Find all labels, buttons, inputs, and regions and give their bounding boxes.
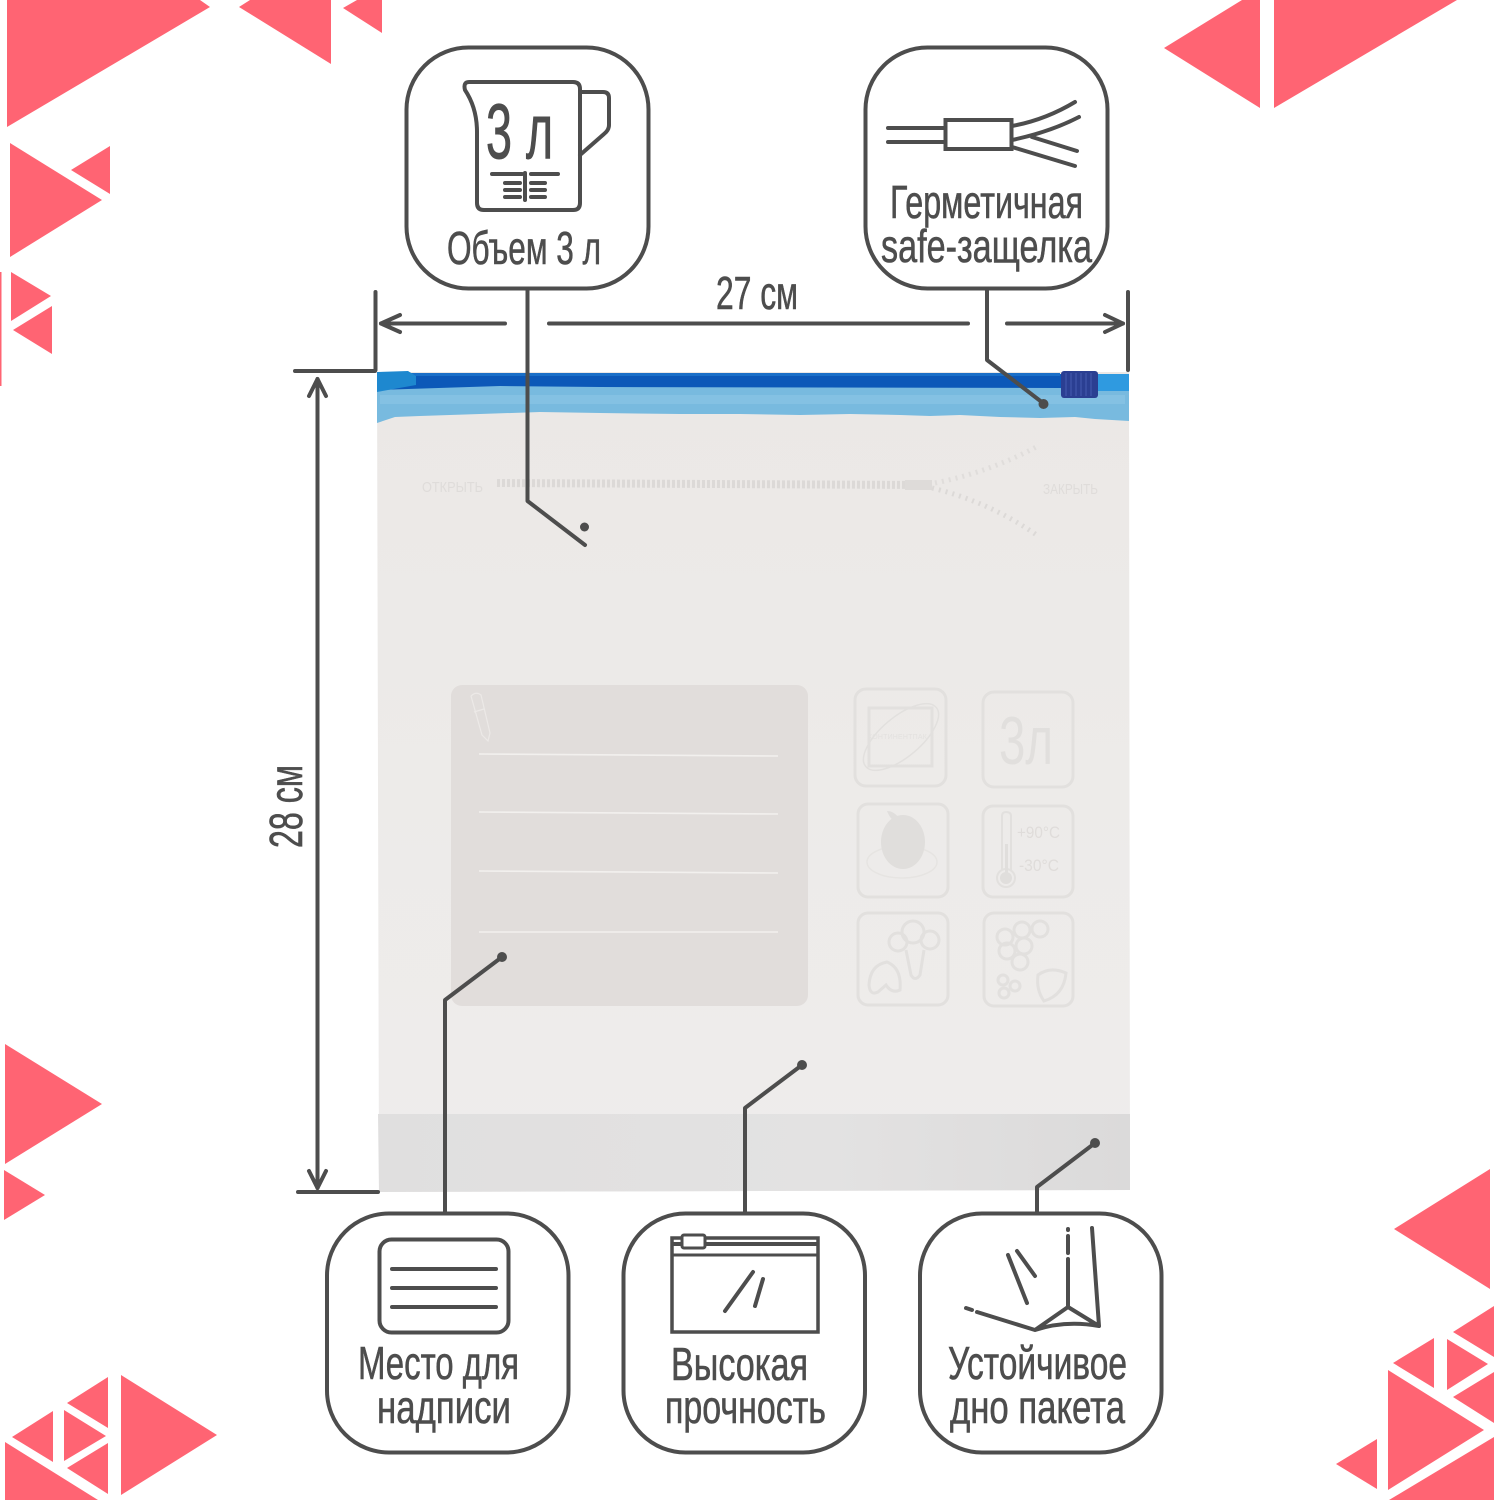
text: seal: Герметичная bbox=[890, 176, 1083, 228]
printed icon: temperature: -30°C bbox=[1019, 856, 1059, 875]
arrow top bbox=[309, 379, 326, 396]
callout: writing space: надписи bbox=[377, 1381, 511, 1433]
text: bottom: Устойчивое bbox=[948, 1337, 1127, 1389]
arrow bottom bbox=[309, 1171, 326, 1188]
icon: bag with scratches bbox=[672, 1235, 818, 1332]
bag bottom fold bbox=[378, 1114, 1130, 1192]
printed icon: 3 l: 3л bbox=[999, 703, 1053, 779]
icon: gusset bottom bbox=[966, 1228, 1099, 1330]
callout: high strength bbox=[624, 1214, 865, 1452]
writing area bbox=[451, 685, 808, 1006]
bag body bbox=[377, 372, 1130, 1192]
text: writing space: Место для bbox=[358, 1337, 519, 1389]
icon: measuring jug: 3 bbox=[486, 87, 512, 175]
decorative triangles: bottom left bbox=[4, 1044, 217, 1500]
arrow left bbox=[381, 315, 400, 332]
leader line: strength bbox=[745, 1060, 807, 1213]
decorative triangles: bottom right bbox=[1336, 1169, 1494, 1500]
callout: safe seal bbox=[866, 48, 1108, 288]
printed icon: temperature bbox=[983, 806, 1073, 897]
label 28 cm: 28 см bbox=[260, 765, 312, 848]
zipper right end bbox=[1098, 374, 1129, 391]
zipper top edge bbox=[405, 373, 1060, 376]
leader line: volume bbox=[528, 289, 589, 545]
printed zipper bbox=[497, 446, 1038, 536]
decorative triangles: top left bbox=[0, 0, 382, 386]
printed icon: brand: КОНТИНЕНТПАК bbox=[868, 734, 928, 741]
close label: ЗАКРЫТЬ bbox=[1043, 481, 1098, 498]
zipper left end bbox=[377, 371, 416, 392]
printed icon: temperature: +90°C bbox=[1017, 823, 1060, 842]
label 27 cm: 27 см bbox=[716, 267, 798, 319]
callout: safe seal: safe-защелка bbox=[881, 220, 1092, 272]
icon: label card bbox=[380, 1240, 508, 1332]
icon: measuring jug: л bbox=[526, 87, 553, 175]
dimension: height 28 cm bbox=[260, 371, 378, 1192]
printed icon: 3 l bbox=[983, 692, 1073, 787]
printed icon: fruit bbox=[984, 913, 1073, 1006]
dark zipper track bbox=[377, 374, 1129, 391]
callout: stable bottom: дно пакета bbox=[950, 1381, 1125, 1433]
icon: seal bbox=[888, 102, 1079, 166]
printed icon: apple bbox=[858, 804, 948, 897]
pen icon bbox=[471, 693, 490, 741]
blue strip bbox=[377, 374, 1129, 423]
open label: ОТКРЫТЬ bbox=[422, 479, 483, 496]
dimension: width 27 cm bbox=[376, 267, 1128, 370]
leader line: seal bbox=[987, 289, 1048, 409]
slider bbox=[1061, 371, 1098, 398]
leader line: bottom bbox=[1037, 1138, 1100, 1213]
callout: high strength: прочность bbox=[665, 1381, 826, 1433]
callout: writing space bbox=[327, 1214, 568, 1452]
decorative triangles: top right bbox=[1164, 0, 1457, 108]
callout: volume 3 l bbox=[406, 48, 648, 288]
text: volume: Объем 3 л bbox=[447, 222, 601, 274]
printed icon: brand bbox=[853, 689, 949, 786]
printed icon: vegetables bbox=[858, 913, 948, 1005]
leader line: writing area bbox=[445, 952, 507, 1213]
lighter blue strip detail bbox=[380, 395, 1125, 404]
text: strength: Высокая bbox=[671, 1338, 808, 1390]
icon: measuring jug bbox=[464, 82, 609, 210]
callout: stable bottom bbox=[920, 1214, 1162, 1452]
arrow right bbox=[1105, 315, 1123, 332]
product: zip bag bbox=[377, 371, 1130, 1192]
